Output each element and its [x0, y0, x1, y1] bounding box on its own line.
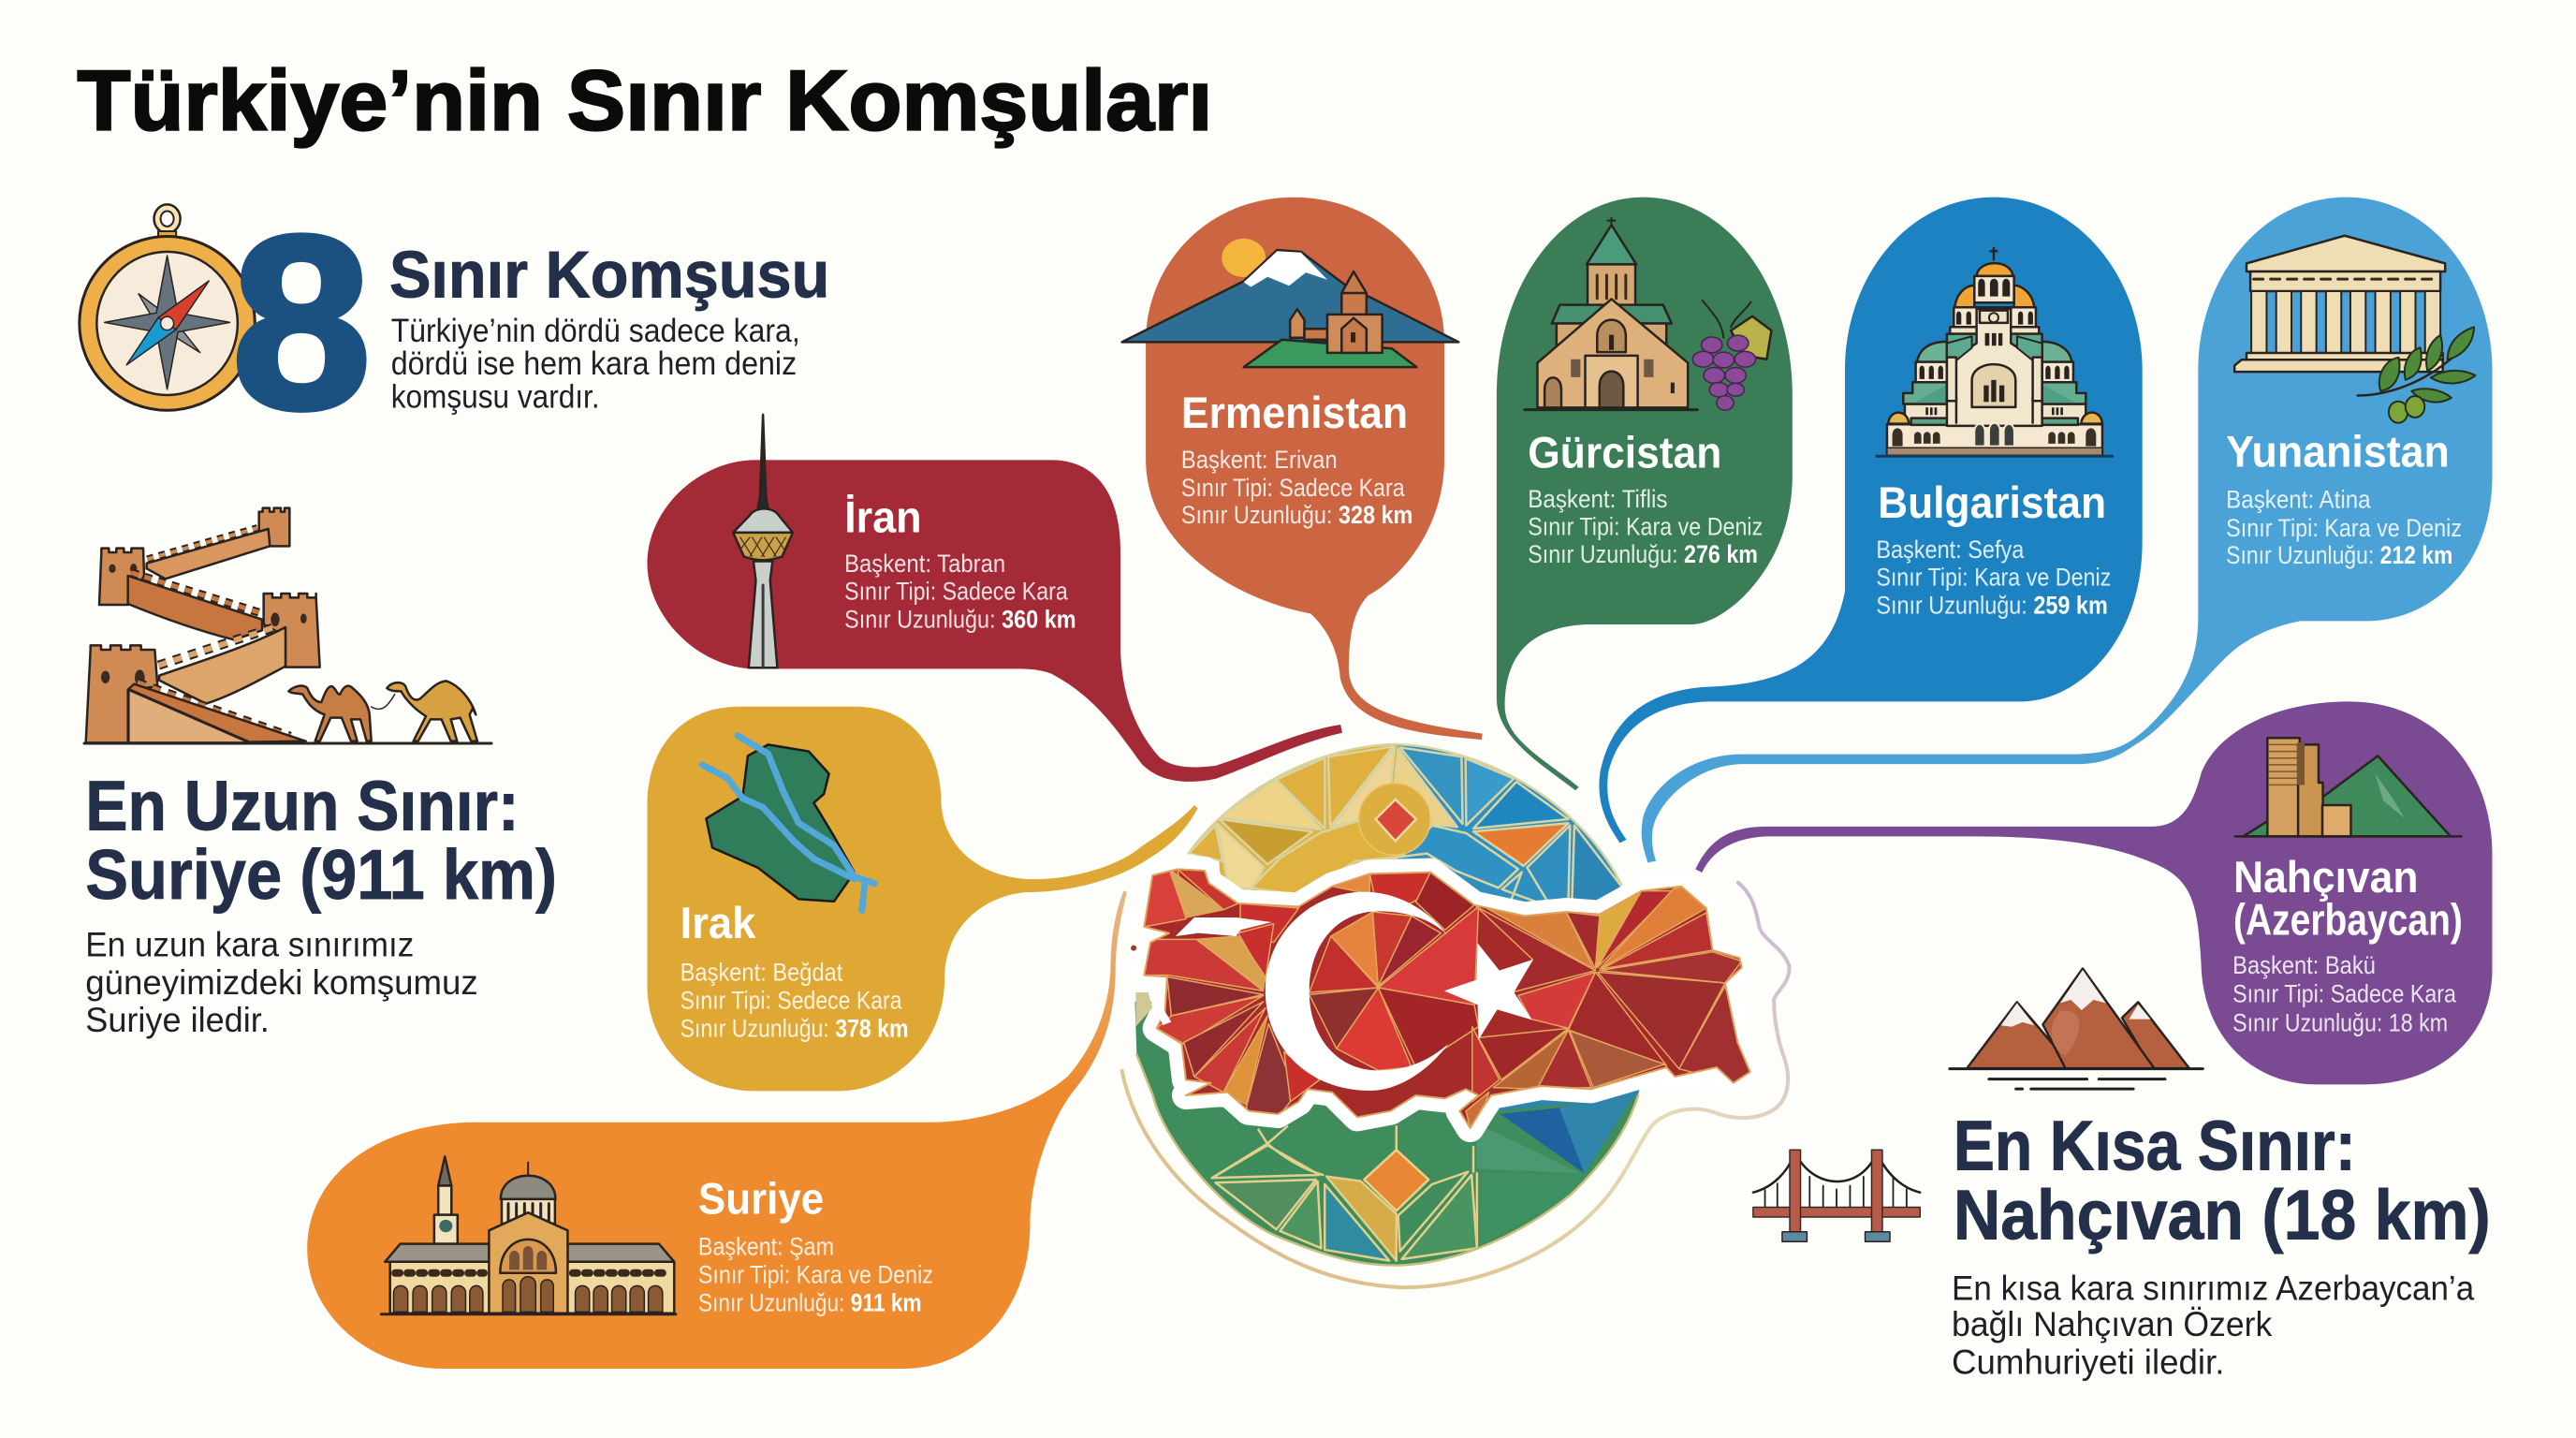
icon: Umayyad Mosque [381, 1156, 676, 1314]
country name: Nahçıvan [2233, 853, 2419, 902]
country name: Suriye [698, 1175, 824, 1225]
panel: shortest border [1753, 969, 2491, 1381]
heading: En Kısa Sınır: En Kısa Sınır: [1954, 1107, 2356, 1185]
text: neighbours description: komşusu vardır. [391, 378, 600, 415]
icon: towers and mountain [2235, 738, 2461, 836]
camel two [387, 681, 477, 741]
text: longest border description: güneyimizdeki komşumuz [85, 963, 478, 1002]
details [2232, 950, 2457, 1037]
details: Sınır Tipi: Sadece Kara [2232, 979, 2457, 1008]
heading: Sınır Komşusu: Sınır Komşusu [389, 238, 829, 312]
details: Başkent: Şam [698, 1232, 834, 1261]
icon: mountains [1950, 969, 2203, 1089]
icon: Milad Tower [733, 415, 793, 668]
speech bubble [648, 460, 1342, 782]
icon: mountain and monastery [1122, 239, 1458, 367]
country name: Bulgaristan [1878, 478, 2106, 528]
details: Sınır Tipi: Kara ve Deniz [1876, 563, 2111, 592]
heading: En Kısa Sınır: Nahçıvan (18 km) [1954, 1175, 2491, 1254]
country name [2233, 853, 2463, 946]
details: Sınır Uzunluğu: 259 km [1876, 590, 2108, 619]
details: Sınır Tipi: Kara ve Deniz [1528, 511, 1763, 540]
country name: Gürcistan [1528, 428, 1721, 477]
details: Sınır Uzunluğu: 378 km [681, 1013, 909, 1042]
country name: İran [844, 493, 922, 543]
heading: En Uzun Sınır [85, 766, 557, 914]
details: Başkent: Erivan [1181, 445, 1338, 474]
details: Sınır Tipi: Sedece Kara [681, 986, 902, 1015]
speech bubble [648, 707, 1197, 1091]
details [681, 957, 909, 1042]
text: longest border description: Suriye iledir. [85, 1001, 270, 1039]
icon: Parthenon and olive branch [2234, 236, 2475, 423]
country name: Ermenistan [1181, 389, 1408, 438]
details: Başkent: Tabran [844, 549, 1005, 578]
panel: Yunanistan [1642, 198, 2492, 862]
speech bubble [1146, 198, 1483, 740]
panel: Suriye [307, 890, 1127, 1369]
text: longest border description: En uzun kara sınırımız [85, 925, 414, 963]
text: longest border description [85, 925, 478, 1039]
details: Başkent: Bakü [2232, 950, 2376, 979]
details: Başkent: Atina [2226, 484, 2371, 513]
lower mosaic [1126, 1002, 1656, 1273]
text: neighbours description: dördü ise hem kara hem deniz [391, 345, 797, 382]
icon: suspension bridge [1753, 1150, 1920, 1241]
details [698, 1232, 933, 1316]
details [1528, 484, 1763, 568]
details [844, 549, 1076, 633]
icon: Iraq map with rivers [702, 736, 874, 910]
details: Sınır Tipi: Sadece Kara [844, 577, 1069, 606]
crescent [1266, 892, 1448, 1091]
details: Başkent: Tiflis [1528, 484, 1667, 513]
details: Sınır Tipi: Kara ve Deniz [698, 1260, 933, 1289]
panel: Iran [648, 415, 1342, 782]
text: neighbours description [391, 313, 800, 415]
text: shortest border description: En kısa kara sınırımız Azerbaycan’a [1952, 1269, 2475, 1307]
details: Sınır Uzunluğu: 360 km [844, 604, 1076, 633]
decorative orbit line around emblem [1122, 883, 1789, 1287]
speech bubble [1642, 198, 2492, 862]
details [1876, 535, 2111, 619]
panel: Nahçıvan [1695, 701, 2492, 1084]
upper mosaic [1187, 743, 1623, 902]
country name: (Azerbaycan) [2233, 896, 2463, 946]
details: Sınır Uzunluğu: 212 km [2226, 540, 2452, 569]
panel: Irak [648, 707, 1197, 1091]
heading: En Uzun Sınır: Suriye (911 km) [85, 835, 557, 914]
panel: longest border [84, 508, 557, 1039]
text: shortest border description [1952, 1269, 2475, 1381]
camel one [288, 686, 372, 741]
details: Sınır Tipi: Sadece Kara [1181, 473, 1405, 502]
central emblem: geometric circle [1123, 730, 1778, 1273]
heading: En Uzun Sınır: En Uzun Sınır: [85, 766, 520, 844]
speech bubble [1695, 701, 2492, 1084]
details [2226, 484, 2462, 569]
details: Sınır Tipi: Kara ve Deniz [2226, 513, 2462, 542]
speech bubble [307, 890, 1127, 1369]
panel: 8 border neighbours [80, 184, 829, 460]
details: Sınır Uzunluğu: 328 km [1181, 500, 1412, 529]
speech bubble [1599, 198, 2143, 843]
details: Sınır Uzunluğu: 911 km [698, 1287, 922, 1316]
icon: church and grapes [1525, 218, 1771, 410]
map of Türkiye with flag motif [1123, 858, 1778, 1139]
panel: Gürcistan [1497, 198, 1793, 790]
speech bubble [1497, 198, 1793, 790]
heading: En Kısa Sınır [1954, 1107, 2491, 1254]
star [1444, 943, 1533, 1040]
panel: Bulgaristan [1599, 198, 2143, 843]
country name: Yunanistan [2226, 427, 2450, 477]
text: shortest border description: bağlı Nahçıvan Özerk [1952, 1305, 2273, 1343]
details [1181, 445, 1412, 529]
icon: cathedral [1877, 248, 2113, 456]
details: Sınır Uzunluğu: 18 km [2232, 1008, 2448, 1037]
details: Sınır Uzunluğu: 276 km [1528, 539, 1758, 568]
text: neighbours description: Türkiye’nin dördü sadece kara, [391, 313, 800, 349]
text: shortest border description: Cumhuriyeti iledir. [1952, 1343, 2224, 1381]
details: Başkent: Beğdat [681, 957, 843, 986]
details: Başkent: Sefya [1876, 535, 2025, 564]
icon: great wall and camels [84, 508, 491, 743]
title: Türkiye’nin Sınır Komşuları [77, 53, 1212, 149]
icon: compass [80, 204, 255, 410]
big number 8: 8 [231, 184, 372, 460]
country name: Irak [681, 899, 756, 948]
panel: Ermenistan [1122, 198, 1483, 740]
